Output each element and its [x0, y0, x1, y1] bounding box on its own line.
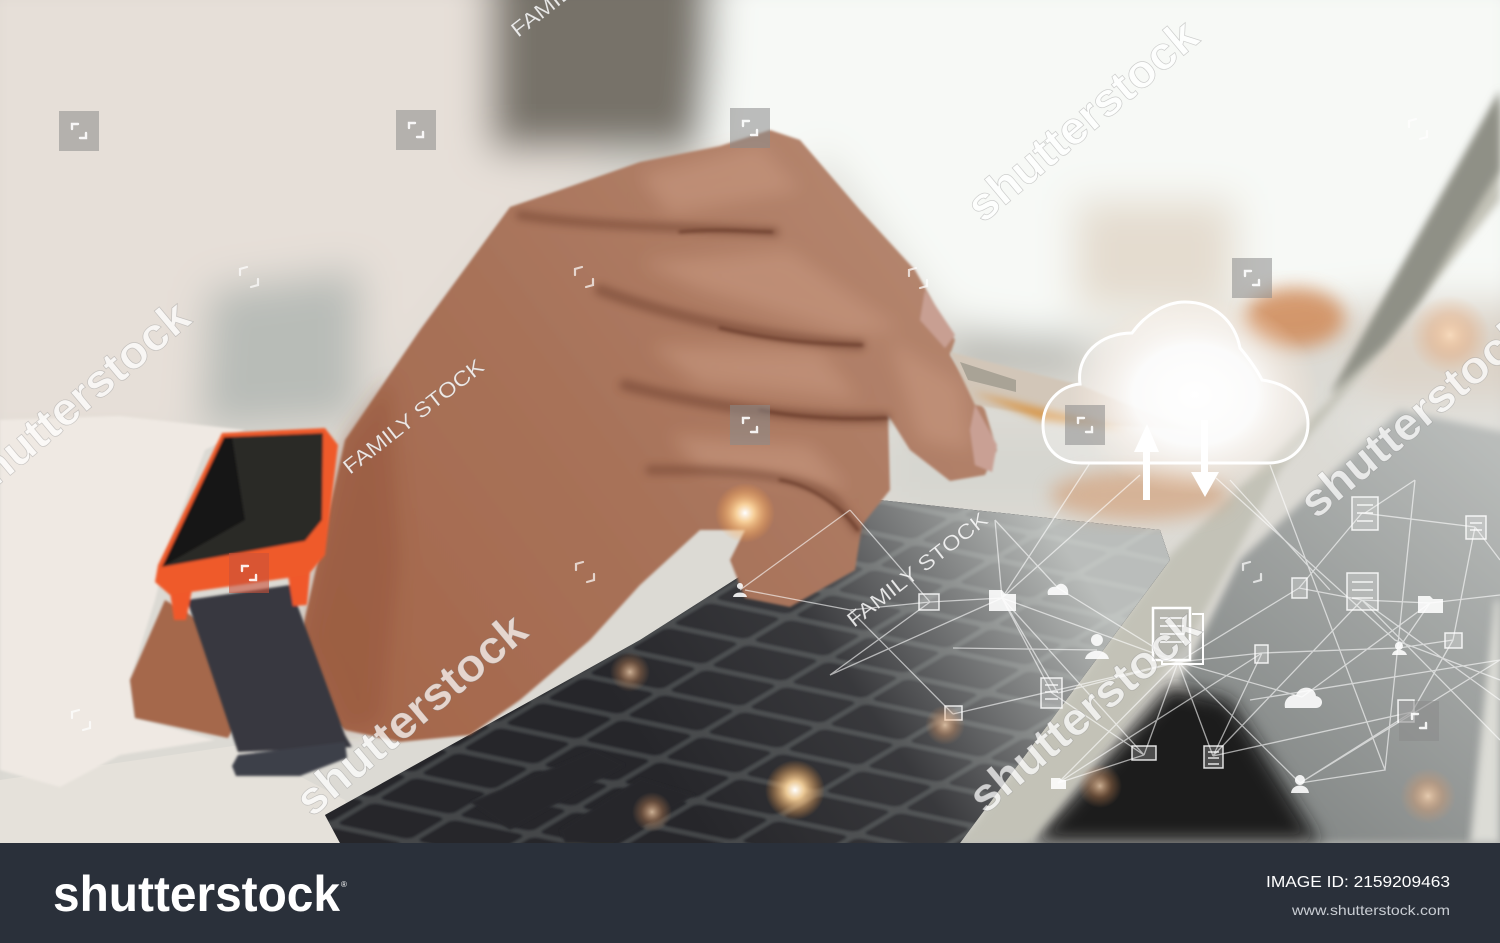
finger highlights [640, 145, 970, 490]
icon: cloud small [1048, 584, 1322, 708]
cloud glow [1050, 288, 1345, 520]
sleeve [0, 416, 245, 787]
upload arrow [1134, 424, 1159, 500]
icon: users [733, 583, 1407, 793]
space bar keys [472, 768, 692, 843]
icon: documents [1041, 497, 1486, 768]
image id: IMAGE ID: 2159209463 [1266, 874, 1450, 891]
table surface [0, 745, 360, 843]
watch screen [162, 433, 323, 567]
watch strap [187, 585, 352, 752]
watermark corner marks [59, 108, 1439, 741]
hand [130, 130, 997, 742]
watermark wordmarks: shutterstock [956, 8, 1208, 232]
watch strap loop [232, 742, 347, 776]
fingernails [920, 290, 955, 348]
registered mark: ® [341, 880, 347, 889]
watch lugs [170, 572, 310, 620]
tablet frame and screen [960, 90, 1500, 843]
document text lines [1045, 505, 1482, 764]
finger shadows [520, 215, 885, 530]
network lines [740, 463, 1500, 783]
icon: main document [1153, 608, 1203, 664]
watch case [155, 428, 338, 595]
icon: folders [989, 590, 1443, 789]
finger creases [680, 230, 888, 530]
download arrow [1191, 420, 1219, 497]
footer logo: shutterstock [53, 866, 340, 922]
watermark wordmarks: FAMILY STOCK [339, 355, 489, 479]
footer bar [0, 843, 1500, 943]
wrist shadow [305, 380, 400, 730]
icon: monitors [919, 594, 1462, 760]
watermark wordmarks: shutterstock [285, 602, 537, 826]
watermark wordmarks: shutterstock [958, 599, 1210, 823]
watermark wordmarks: FAMILY STOCK [843, 508, 993, 632]
network icons [733, 497, 1486, 793]
cloud icon [1043, 302, 1308, 500]
smartwatch [155, 428, 352, 776]
stylus pen [950, 352, 1190, 430]
keyboard [325, 500, 1170, 843]
lens flares [610, 295, 1490, 832]
website: www.shutterstock.com [1291, 902, 1450, 918]
